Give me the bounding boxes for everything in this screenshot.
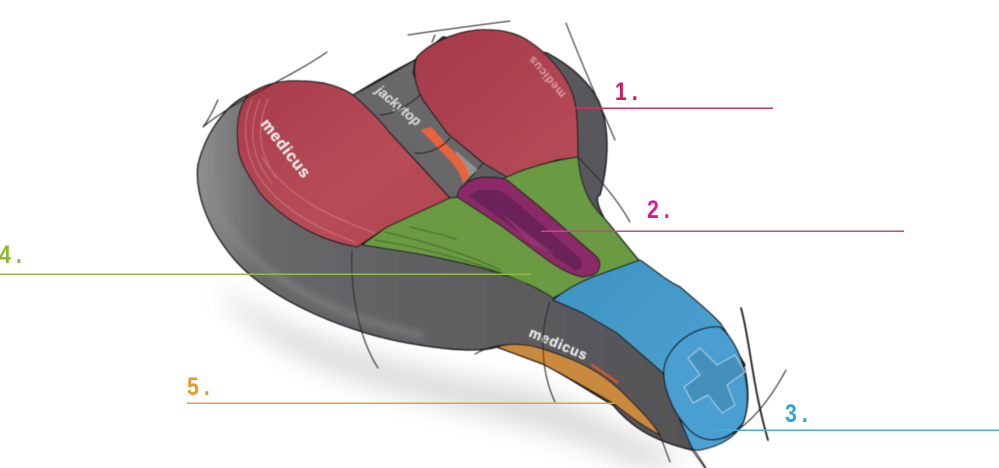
jackytop label: jackytop xyxy=(372,81,424,129)
panel: right red cushion xyxy=(415,30,578,177)
panel: left red cushion xyxy=(237,81,450,247)
panel: orange underside xyxy=(497,344,660,435)
ground shadow xyxy=(215,285,690,468)
callout 5: 5. xyxy=(187,372,215,400)
nose end cap xyxy=(664,327,747,440)
icon: cross xyxy=(684,348,745,413)
callout 1: 1. xyxy=(615,77,643,105)
sketch strokes xyxy=(203,21,786,468)
saddle body: dark grey shell xyxy=(197,37,745,450)
rim highlight xyxy=(209,150,420,335)
medicus logo right: medicus xyxy=(526,53,568,100)
panel: purple cut-out xyxy=(457,177,600,277)
centre channel: grey xyxy=(353,60,483,198)
callout 3: 3. xyxy=(785,399,813,427)
orange stripe xyxy=(421,127,469,183)
saddle xyxy=(197,21,786,468)
panel: green zone xyxy=(362,157,640,298)
panel: blue nose xyxy=(553,260,748,450)
channel highlight xyxy=(455,150,478,180)
medicus logo side: medicus xyxy=(527,324,591,363)
medicus logo left: medicus xyxy=(257,116,314,182)
callout 2: 2. xyxy=(647,195,675,223)
